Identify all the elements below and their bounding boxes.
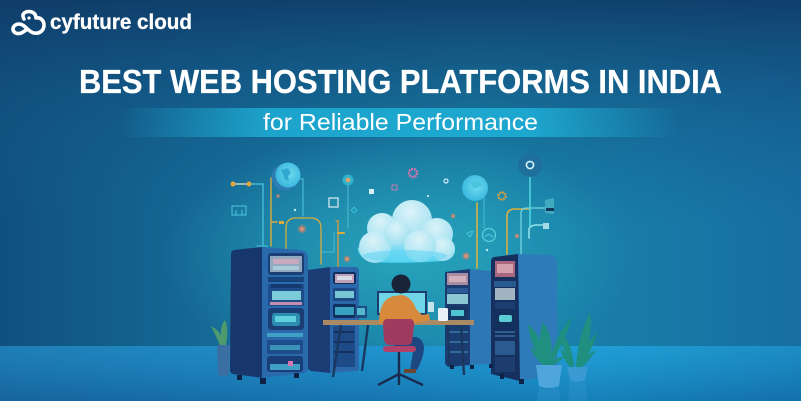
chair base [378, 352, 423, 385]
logo [13, 10, 192, 34]
subtitle band [120, 108, 680, 137]
network connector lines [233, 177, 548, 280]
rack feet: right racks [450, 364, 524, 384]
desk legs [333, 325, 464, 377]
server rack: large right [491, 254, 557, 381]
torso [379, 295, 430, 323]
server rack: large left [230, 247, 308, 378]
plant: right front [528, 317, 572, 388]
legs [393, 337, 424, 370]
subtitle: for Reliable Performance [263, 109, 538, 135]
glowing sparks [276, 194, 520, 263]
floor reflections [537, 381, 588, 401]
icon: wall sockets [543, 198, 554, 229]
icon: centre globe [462, 175, 488, 201]
icon: cloud logo [13, 12, 44, 34]
chair seat [383, 346, 416, 352]
server rack: second left [308, 267, 359, 373]
icon: small network nodes [230, 174, 397, 224]
rack feet: large left [237, 373, 299, 384]
monitor [377, 291, 427, 320]
plant: right back [560, 313, 597, 382]
chair back [383, 319, 414, 345]
head [392, 274, 410, 294]
icon: device outlines [232, 198, 496, 242]
icon: gears [409, 169, 506, 200]
paper in hand [428, 302, 434, 312]
cloud [358, 200, 455, 263]
icon: right node [518, 153, 542, 177]
shoe [404, 369, 416, 373]
desk top [323, 320, 474, 325]
brand name: cyfuture cloud [50, 10, 192, 34]
small tablet [355, 306, 367, 318]
icon: left globe [272, 162, 300, 190]
title: BEST WEB HOSTING PLATFORMS IN INDIA [79, 64, 722, 101]
floor [0, 346, 801, 401]
plant: left [211, 320, 230, 376]
mug [438, 308, 448, 321]
server rack: centre right [445, 269, 492, 367]
desk and person [323, 274, 474, 385]
